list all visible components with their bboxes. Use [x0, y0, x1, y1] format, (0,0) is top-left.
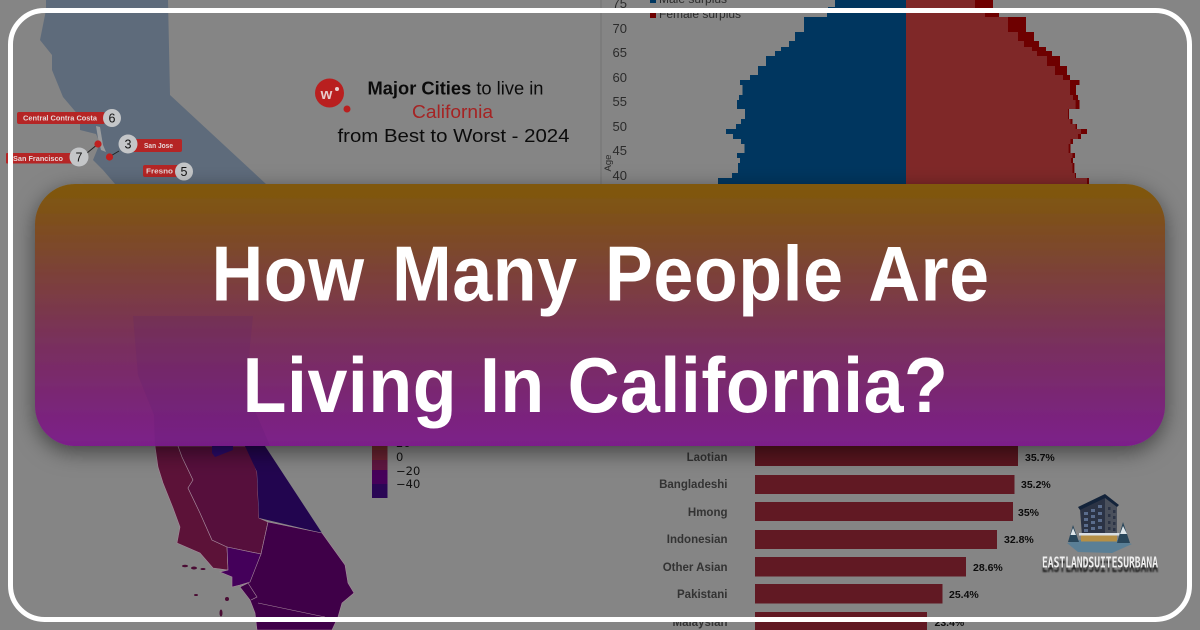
row: hidden top [665, 420, 1027, 440]
male bars [718, 0, 906, 184]
row: Other Asian: Other Asian [663, 562, 728, 574]
brand name text [1042, 554, 1158, 576]
bar chart: percentage by Asian group [659, 420, 1055, 630]
city label: Central Contra Costa: 6 [109, 112, 116, 126]
region: south east [240, 522, 354, 630]
region: small northern county [212, 446, 233, 457]
row: Other Asian [663, 557, 1003, 576]
city label: Fresno: Fresno [146, 166, 173, 176]
row: Pakistani [677, 584, 979, 604]
row: Laotian [687, 446, 1055, 466]
axis labels: Age [603, 155, 614, 171]
color bar legend [372, 430, 420, 498]
title text: How Many People Are [211, 230, 990, 317]
region: coast [155, 446, 228, 570]
row: Hmong: Hmong [688, 507, 728, 519]
city label: San Francisco: 7 [76, 150, 83, 164]
text: heading lines: from Best to Worst - 2024 [338, 126, 570, 146]
row: Indonesian: 32.8% [1004, 534, 1034, 546]
map: top of California with major cities [6, 0, 266, 184]
row: hidden top: Cambodian [665, 424, 728, 436]
row: Indonesian: Indonesian [667, 534, 728, 546]
row: Hmong [688, 502, 1040, 521]
row: Malaysian [673, 612, 965, 630]
row: Other Asian: 28.6% [973, 562, 1003, 574]
row: Pakistani: 25.4% [949, 589, 979, 601]
city label: Fresno [143, 162, 193, 180]
axis labels: 60 [613, 70, 627, 85]
row: Hmong: 35% [1018, 507, 1040, 519]
color bar legend: 0 [396, 450, 403, 464]
axis labels: 50 [613, 119, 627, 134]
legend: surplus key: Female surplus [659, 7, 741, 21]
color bar legend: −20 [396, 464, 420, 478]
icon: hotel building [1067, 494, 1132, 553]
text: heading lines: California [412, 102, 494, 122]
faint map silhouette inside banner [133, 316, 270, 446]
icon: brand logo [315, 78, 350, 112]
axis labels: 40 [613, 168, 627, 183]
text: heading lines [338, 78, 570, 146]
row: Bangladeshi [659, 475, 1051, 494]
map: southern California heat map [155, 446, 354, 630]
city label: San Jose: 3 [125, 138, 132, 152]
row: Indonesian [667, 530, 1034, 549]
row: Laotian: 35.7% [1025, 452, 1055, 464]
title banner [35, 184, 1165, 446]
chart: population pyramid [601, 0, 1089, 184]
city label: San Jose [118, 134, 182, 154]
icon: brand logo: w [320, 86, 333, 103]
text: heading lines: Major Cities to live in [368, 78, 544, 98]
title text: Living In California? [243, 341, 948, 429]
row: Bangladeshi: 35.2% [1021, 479, 1051, 491]
row: Pakistani: Pakistani [677, 589, 728, 601]
axis labels [603, 0, 627, 183]
axis labels: 45 [613, 143, 627, 158]
region: central valley [178, 446, 268, 554]
brand logo: Eastland Suites Urbana [1042, 494, 1158, 576]
female bars [906, 0, 1087, 184]
city label: Fresno: 5 [181, 165, 188, 179]
islands [182, 565, 229, 616]
city label: San Jose: San Jose [144, 141, 173, 150]
female surplus bars [906, 0, 1089, 184]
city label: San Francisco: San Francisco [13, 154, 63, 163]
axis labels: 55 [613, 94, 627, 109]
axis labels: 70 [613, 21, 627, 36]
city label: Central Contra Costa [17, 109, 121, 127]
row: Laotian: Laotian [687, 452, 728, 464]
axis labels: 65 [613, 45, 627, 60]
row: Bangladeshi: Bangladeshi [659, 479, 728, 491]
heading block: Major Cities to live in California [315, 78, 570, 146]
color bar legend: 20 [396, 436, 411, 450]
city label: San Francisco [6, 148, 88, 166]
color bar legend: −40 [396, 477, 420, 491]
row: Malaysian: Malaysian [673, 617, 728, 629]
row: Malaysian: 23.4% [934, 617, 965, 629]
title text [211, 230, 990, 429]
city label: Central Contra Costa: Central Contra Costa [23, 114, 98, 122]
region: eastern sierra [245, 446, 322, 533]
legend: surplus key [650, 0, 741, 21]
inner boundary [248, 583, 325, 617]
region: los angeles [220, 547, 261, 587]
